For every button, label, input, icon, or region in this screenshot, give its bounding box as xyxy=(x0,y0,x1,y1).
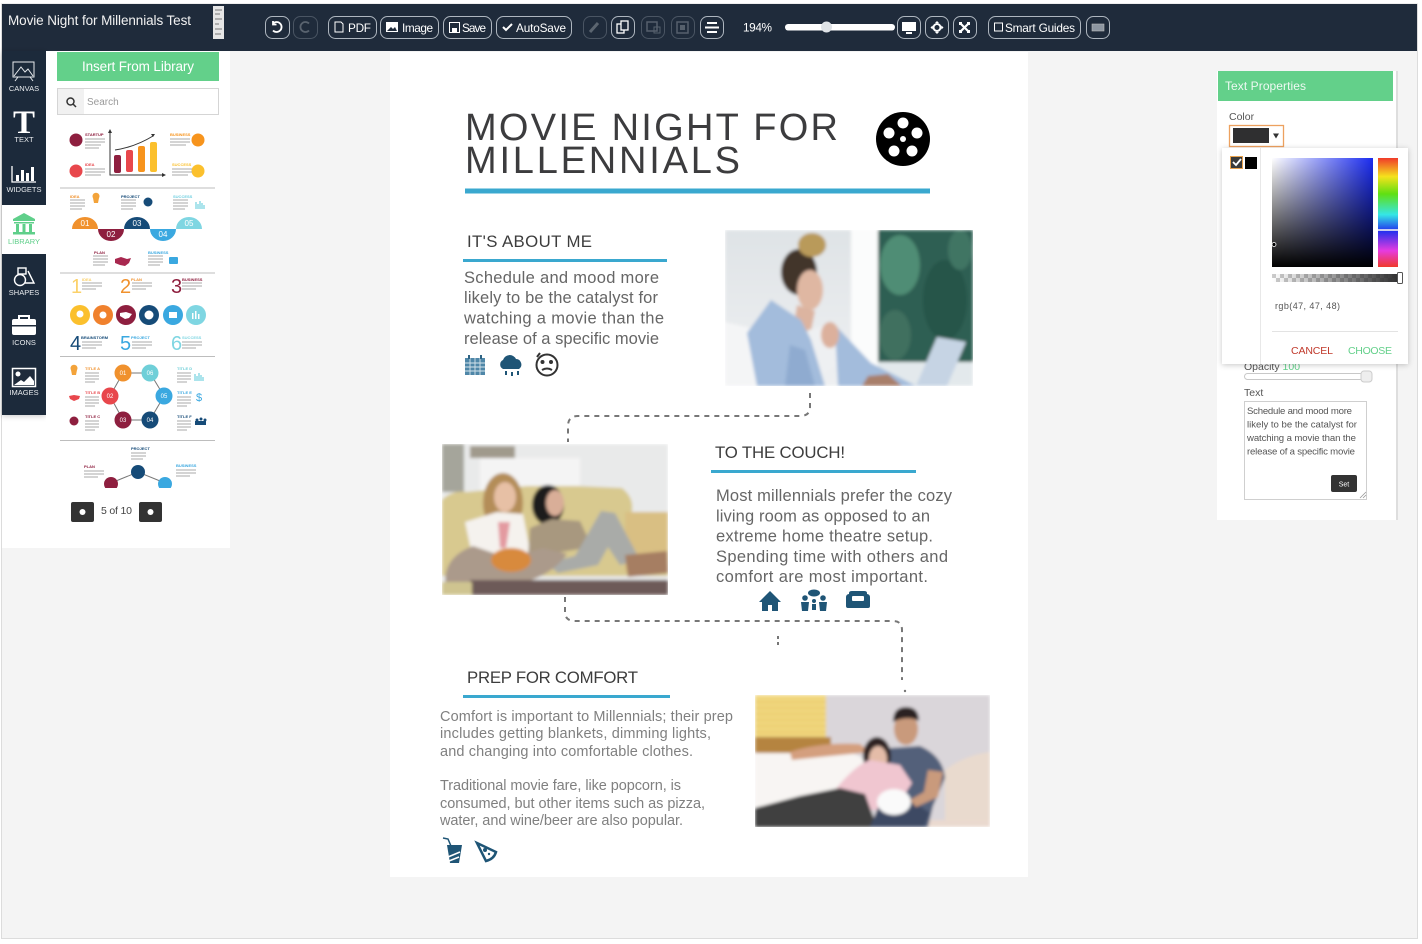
insert from library button xyxy=(57,52,219,81)
image button xyxy=(380,16,438,38)
text area: likely to be the catalyst for xyxy=(1247,420,1358,430)
text properties panel xyxy=(1217,71,1398,520)
zoom level: 194% xyxy=(743,20,772,34)
left navigation xyxy=(2,51,46,415)
color value: rgb(47, 47, 48) xyxy=(1275,301,1340,311)
template thumbnail: wave timeline: PLAN xyxy=(94,250,105,255)
template thumbnail: wave timeline: 05 xyxy=(185,219,194,228)
top toolbar xyxy=(2,4,1417,51)
template thumbnail: numbered icons: BRAINSTORM xyxy=(81,335,109,340)
template thumbnail: numbered icons: 2 xyxy=(120,276,131,298)
icon: confused face xyxy=(536,353,558,376)
text block: most millennials: Most millennials prefer the cozy xyxy=(716,487,953,505)
heading rule xyxy=(463,259,667,262)
nav item: shapes: SHAPES xyxy=(9,288,39,297)
fit button xyxy=(954,16,976,38)
document title: Movie Night for Millennials Test xyxy=(8,13,191,28)
icon: rain cloud xyxy=(500,355,521,376)
align button xyxy=(700,16,724,38)
redo button xyxy=(294,16,318,38)
nav item: icons: ICONS xyxy=(12,338,36,347)
photo: couple with popcorn xyxy=(755,695,990,827)
autosave button xyxy=(496,16,572,38)
hue slider xyxy=(1378,158,1398,267)
template thumbnail: numbered icons: SUCCESS xyxy=(182,335,202,340)
nav item: library active: LIBRARY xyxy=(8,237,40,246)
heading: prep for comfort: PREP FOR COMFORT xyxy=(467,668,638,687)
text block: movie fare: water, and wine/beer are also popular. xyxy=(439,813,683,829)
template thumbnail: bar chart: IDEA xyxy=(85,162,95,167)
template thumbnail: wave timeline: BUSINESS xyxy=(148,250,169,255)
icon: drink cup xyxy=(443,838,462,863)
heading: it's about me: IT'S ABOUT ME xyxy=(467,232,592,251)
photo: two women on a couch xyxy=(442,444,668,595)
icon: calendar xyxy=(465,355,485,375)
text block: schedule and mood xyxy=(463,269,664,348)
text block: schedule and mood: Schedule and mood more xyxy=(464,269,659,287)
text block: movie fare: consumed, but other items such as pizza, xyxy=(440,796,705,812)
undo button xyxy=(266,16,290,38)
template thumbnail: hexagon cycle: 03 xyxy=(120,418,127,424)
move button xyxy=(926,16,948,38)
pdf button: PDF xyxy=(348,21,371,35)
template thumbnail: project tree xyxy=(84,448,196,488)
nav item: images xyxy=(9,368,39,397)
text area: watching a movie than the xyxy=(1246,433,1356,444)
text area xyxy=(1244,402,1366,500)
nav item: widgets: WIDGETS xyxy=(6,185,42,194)
nav item: shapes xyxy=(9,268,39,297)
ungroup button xyxy=(672,16,694,38)
photo: woman with blanket and laptop xyxy=(725,230,973,386)
document thumbnail xyxy=(213,6,224,39)
nav item: icons xyxy=(12,316,36,347)
color picker popup xyxy=(1222,148,1408,364)
color swatch dropdown xyxy=(1230,126,1284,146)
search box xyxy=(58,88,218,114)
template thumbnail: bar chart: BUSINESS xyxy=(170,132,191,137)
heading rule xyxy=(463,695,670,698)
keyboard button xyxy=(1086,16,1110,38)
template thumbnail: bar chart: STARTUP xyxy=(85,132,104,137)
text area: release of a specific movie xyxy=(1247,446,1355,458)
template thumbnail: hexagon cycle: 05 xyxy=(161,394,168,400)
saturation value square xyxy=(1272,158,1373,267)
template thumbnail: hexagon cycle: 02 xyxy=(107,394,114,400)
autosave button: AutoSave xyxy=(516,21,566,35)
opacity label: Opacity 100 xyxy=(1244,361,1300,373)
template thumbnail: numbered icons: 4 xyxy=(70,333,81,355)
template thumbnail: hexagon cycle xyxy=(69,364,206,430)
template thumbnail: numbered icons: PLAN xyxy=(131,277,142,282)
image button: Image xyxy=(402,21,433,35)
icon: film reel xyxy=(876,112,930,166)
title: MOVIE NIGHT FOR xyxy=(465,107,838,149)
icon: armchair xyxy=(846,591,870,608)
template thumbnail: wave timeline: 03 xyxy=(133,219,142,228)
text area: Schedule and mood more xyxy=(1247,406,1352,417)
nav item: text: TEXT xyxy=(14,135,34,144)
section: it's about me xyxy=(463,232,667,376)
nav item: canvas xyxy=(9,62,39,93)
save button xyxy=(444,16,492,38)
template thumbnail: numbered icons: 6 xyxy=(171,333,182,355)
nav item: widgets xyxy=(6,166,42,194)
cancel button: CANCEL xyxy=(1291,345,1333,357)
template thumbnail: wave timeline: 01 xyxy=(81,219,90,228)
text block: comfort prep xyxy=(440,709,733,760)
icon: pizza slice xyxy=(477,843,496,861)
nav item: images: IMAGES xyxy=(9,388,39,397)
heading: to the couch: TO THE COUCH! xyxy=(715,443,845,462)
title xyxy=(465,107,838,182)
smart guides button xyxy=(988,16,1080,38)
pagination xyxy=(71,502,162,522)
template thumbnail: hexagon cycle: 01 xyxy=(120,371,127,377)
opacity slider xyxy=(1244,371,1372,382)
dashed connector 2 xyxy=(565,597,906,692)
text block: comfort prep: Comfort is important to Millennials; their prep xyxy=(440,709,733,725)
template thumbnail: wave timeline xyxy=(70,193,204,266)
template thumbnail: wave timeline: 04 xyxy=(159,230,168,239)
section: to the couch xyxy=(711,443,953,611)
template thumbnail: wave timeline: PROJECT xyxy=(121,194,140,199)
swatch: black xyxy=(1245,157,1257,169)
infographic document page xyxy=(390,52,1028,877)
text block: most millennials: Spending time with others and xyxy=(716,548,948,566)
smart guides button: Smart Guides xyxy=(1005,21,1075,35)
search box: Search xyxy=(87,97,119,108)
choose button: CHOOSE xyxy=(1348,345,1392,357)
group button xyxy=(642,16,664,38)
template thumbnail: hexagon cycle: TITLE A xyxy=(85,366,100,371)
pagination: 5 of 10 xyxy=(101,505,132,517)
zoom slider xyxy=(785,22,895,32)
pdf button xyxy=(328,16,376,38)
duplicate button xyxy=(612,16,634,38)
template thumbnail: hexagon cycle: TITLE B xyxy=(85,390,100,395)
icon: house xyxy=(759,591,781,611)
pencil button xyxy=(584,16,606,38)
template thumbnail: hexagon cycle: TITLE E xyxy=(177,390,192,395)
alpha slider xyxy=(1272,272,1402,284)
text block: movie fare xyxy=(439,778,705,829)
template thumbnail: project tree: PLAN xyxy=(84,464,95,469)
title rule xyxy=(465,188,930,194)
text area: Set xyxy=(1339,482,1349,488)
text label: Text xyxy=(1244,387,1263,399)
nav item: text: T xyxy=(13,105,35,141)
template thumbnail: bar chart: SUCCESS xyxy=(172,162,192,167)
template thumbnail: numbered icons: PROJECT xyxy=(131,335,150,340)
template thumbnail: numbered icons: BUSINESS xyxy=(182,277,203,282)
panel header: Text Properties xyxy=(1225,79,1306,93)
template thumbnail: numbered icons: 1 xyxy=(71,276,82,298)
template thumbnail: hexagon cycle: TITLE D xyxy=(177,366,192,371)
color label: Color xyxy=(1229,111,1255,123)
swatch: selected color xyxy=(1230,156,1242,168)
section: prep for comfort xyxy=(439,668,733,863)
template thumbnail: project tree: BUSINESS xyxy=(176,463,197,468)
template thumbnail: hexagon cycle: 04 xyxy=(147,418,154,424)
panel header xyxy=(1218,71,1393,101)
template thumbnail: hexagon cycle: TITLE C xyxy=(85,414,100,419)
template thumbnail: wave timeline: 02 xyxy=(107,230,116,239)
text block: most millennials: extreme home theatre setup. xyxy=(716,528,933,546)
library panel xyxy=(46,51,219,522)
nav item: library active xyxy=(2,205,46,254)
text block: most millennials: living room as opposed to an xyxy=(716,508,930,526)
title: MILLENNIALS xyxy=(465,140,740,182)
text block: most millennials xyxy=(716,487,953,586)
dashed connector 1 xyxy=(568,393,810,442)
nav item: canvas: CANVAS xyxy=(9,84,39,93)
text block: comfort prep: and changing into comfortable clothes. xyxy=(440,744,693,760)
template thumbnail: hexagon cycle: $ xyxy=(196,392,202,404)
template thumbnail: numbered icons xyxy=(70,276,206,355)
template thumbnail: bar chart xyxy=(70,129,204,178)
template thumbnail: wave timeline: SUCCESS xyxy=(173,194,193,199)
template thumbnail: numbered icons: 5 xyxy=(120,333,131,355)
template thumbnail: numbered icons: IDEA xyxy=(82,277,92,282)
icon: family xyxy=(801,590,827,611)
text block: most millennials: comfort are most important. xyxy=(716,568,928,586)
text block: comfort prep: includes getting blankets, dimming lights, xyxy=(440,726,711,742)
template thumbnail: hexagon cycle: 06 xyxy=(147,371,154,377)
text block: schedule and mood: watching a movie than the xyxy=(463,310,664,328)
template thumbnail: numbered icons: 3 xyxy=(171,276,182,298)
text block: movie fare: Traditional movie fare, like popcorn, is xyxy=(440,778,681,794)
template thumbnail: hexagon cycle: TITLE F xyxy=(177,414,192,419)
save button: Save xyxy=(462,21,486,35)
insert from library button: Insert From Library xyxy=(82,59,194,74)
heading rule xyxy=(711,470,916,473)
monitor button xyxy=(898,16,920,38)
template thumbnail: project tree: PROJECT xyxy=(131,446,150,451)
text block: schedule and mood: release of a specific movie xyxy=(464,330,659,348)
text block: schedule and mood: likely to be the catalyst for xyxy=(464,289,658,307)
template thumbnail: wave timeline: IDEA xyxy=(70,194,80,199)
